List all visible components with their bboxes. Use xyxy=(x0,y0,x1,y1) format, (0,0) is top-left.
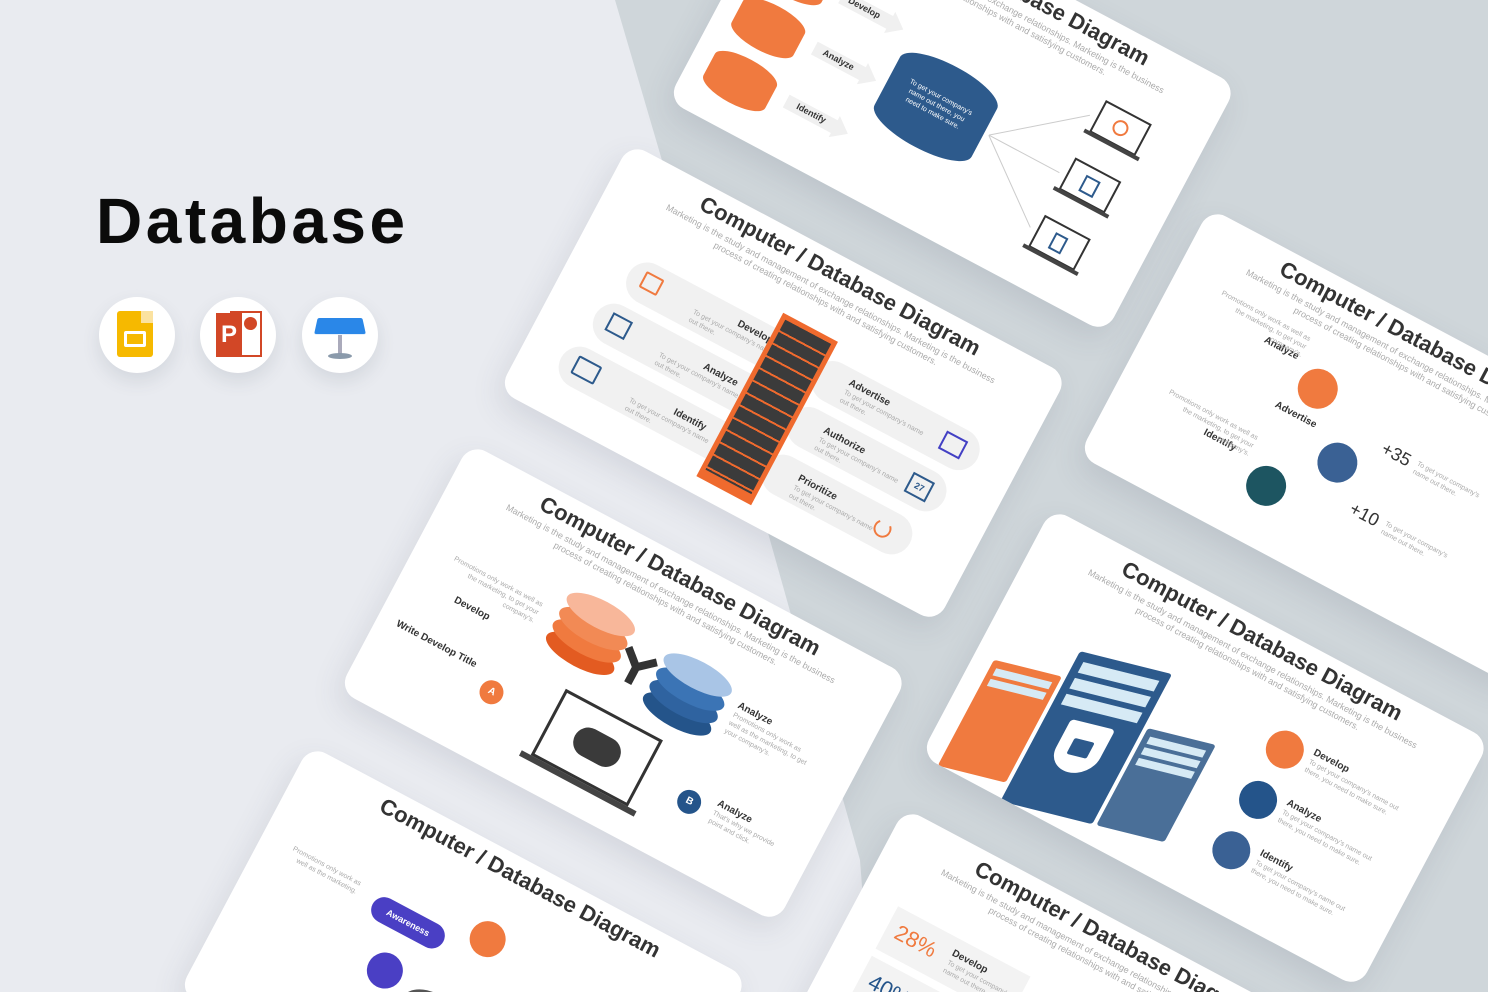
card title: Computer / Database Diagram xyxy=(1118,556,1407,726)
orange cylinders xyxy=(703,0,823,112)
title: Database xyxy=(96,185,409,257)
list items: To get your company's name out there, you need to make sure. xyxy=(1303,759,1400,817)
stats: Develop xyxy=(950,948,990,976)
steps: Promotions only work as well as the marketing, to get your company's. xyxy=(1220,290,1311,359)
card 5: secure servers xyxy=(921,508,1488,988)
callout A: Develop xyxy=(452,595,492,623)
list items: To get your company's name out there, you need to make sure. xyxy=(1250,859,1346,917)
card 2: server rack xyxy=(499,143,1068,623)
list items xyxy=(1212,730,1400,917)
server illustration xyxy=(938,652,1215,842)
right pills: 27 xyxy=(913,480,926,494)
stats xyxy=(852,906,1030,992)
numbers xyxy=(1346,438,1481,560)
connector xyxy=(624,646,658,685)
left pills xyxy=(558,262,775,458)
callout B xyxy=(677,700,808,848)
list items: Analyze xyxy=(1285,798,1323,825)
right pills: To get your company's name out there. xyxy=(838,389,925,437)
stats: 28% xyxy=(890,920,941,963)
right pills: To get your company's name out there. xyxy=(788,484,874,533)
left pills: To get your company's name out there. xyxy=(687,309,774,357)
callout B: B xyxy=(684,795,695,808)
callout A: Write Develop Title xyxy=(394,618,479,670)
callout A: A xyxy=(486,685,497,698)
right pills: Prioritize xyxy=(796,473,839,503)
server rack xyxy=(696,313,838,505)
steps: Promotions only work as well as the marketing, to get your company's. xyxy=(1168,389,1259,458)
list items: To get your company's name out there, you need to make sure. xyxy=(1276,809,1373,867)
card 6: right top xyxy=(1079,208,1488,688)
icon: google slides xyxy=(99,297,175,373)
card title: Computer / Database Diagram xyxy=(696,191,985,361)
arrows xyxy=(783,0,903,137)
callout B: Analyze xyxy=(715,798,754,826)
left pills: Identify xyxy=(671,407,708,433)
orange db stack xyxy=(546,592,635,675)
blue cylinder xyxy=(866,41,1005,172)
callout B: Promotions only work as well as the marketing, to get your company's. xyxy=(723,712,808,767)
card 7: bottom right percentages xyxy=(774,808,1343,992)
steps xyxy=(1168,290,1358,506)
callout B: Analyze xyxy=(736,700,774,728)
icon: keynote xyxy=(302,297,378,373)
numbers: To get your company's name out there. xyxy=(1411,461,1481,500)
awareness pill xyxy=(367,893,449,953)
right pills: To get your company's name out there. xyxy=(813,437,899,485)
icon: powerpoint xyxy=(200,297,276,373)
card 4: bottom-left cycle xyxy=(179,745,748,992)
arrows: Identify xyxy=(795,101,828,125)
icon: powerpoint: P xyxy=(221,321,237,348)
right pills: Authorize xyxy=(821,425,867,457)
laptop with cloud xyxy=(519,688,663,817)
right pills xyxy=(763,361,980,554)
steps: Analyze xyxy=(1262,335,1301,362)
right pills: Advertise xyxy=(847,378,892,409)
list items: Develop xyxy=(1311,747,1351,775)
callout B: That's why we provide point and click. xyxy=(707,810,775,848)
card title: Computer / Database Diagram xyxy=(536,491,825,661)
callout A: Promotions only work as well as the marketing, to get your company's. xyxy=(453,556,544,624)
left pills: To get your company's name out there. xyxy=(653,352,739,400)
side text: Promotions only work as well as the marketing. xyxy=(291,846,362,896)
steps: Advertise xyxy=(1273,399,1318,430)
numbers: To get your company's name out there. xyxy=(1379,521,1449,560)
cycle icons xyxy=(366,921,506,992)
numbers: +10 xyxy=(1346,498,1383,530)
blue db stack xyxy=(642,653,732,736)
steps: Identify xyxy=(1202,427,1238,454)
card 3: sync databases xyxy=(339,443,908,923)
blue cylinder: To get your company's name out there, you need to make sure. xyxy=(904,78,973,131)
numbers: +35 xyxy=(1378,438,1415,470)
left pills: Develop xyxy=(735,318,775,346)
card 2: server rack: Marketing is the study and management of exchange relationships. Marketing is the business process of creating relationships with and satisfying customers. xyxy=(664,202,997,385)
card 3: sync databases: Marketing is the study and management of exchange relationships. Marketing is the business process of creating relationships with and satisfying customers. xyxy=(504,502,837,685)
left pills: To get your company's name out there. xyxy=(623,397,710,445)
card 5: secure servers: Marketing is the study and management of exchange relationships. Marketing is the business process of creating relationships with and satisfying customers. xyxy=(1086,567,1419,750)
card 1: top diagram xyxy=(668,0,1237,333)
callout A xyxy=(394,556,544,704)
arrows: Analyze xyxy=(821,47,856,72)
list items: Identify xyxy=(1258,848,1295,874)
laptops xyxy=(988,100,1152,276)
card title: Computer / Database Diagram xyxy=(376,793,665,963)
left pills: Analyze xyxy=(701,361,740,389)
awareness pill: Awareness xyxy=(385,907,431,938)
